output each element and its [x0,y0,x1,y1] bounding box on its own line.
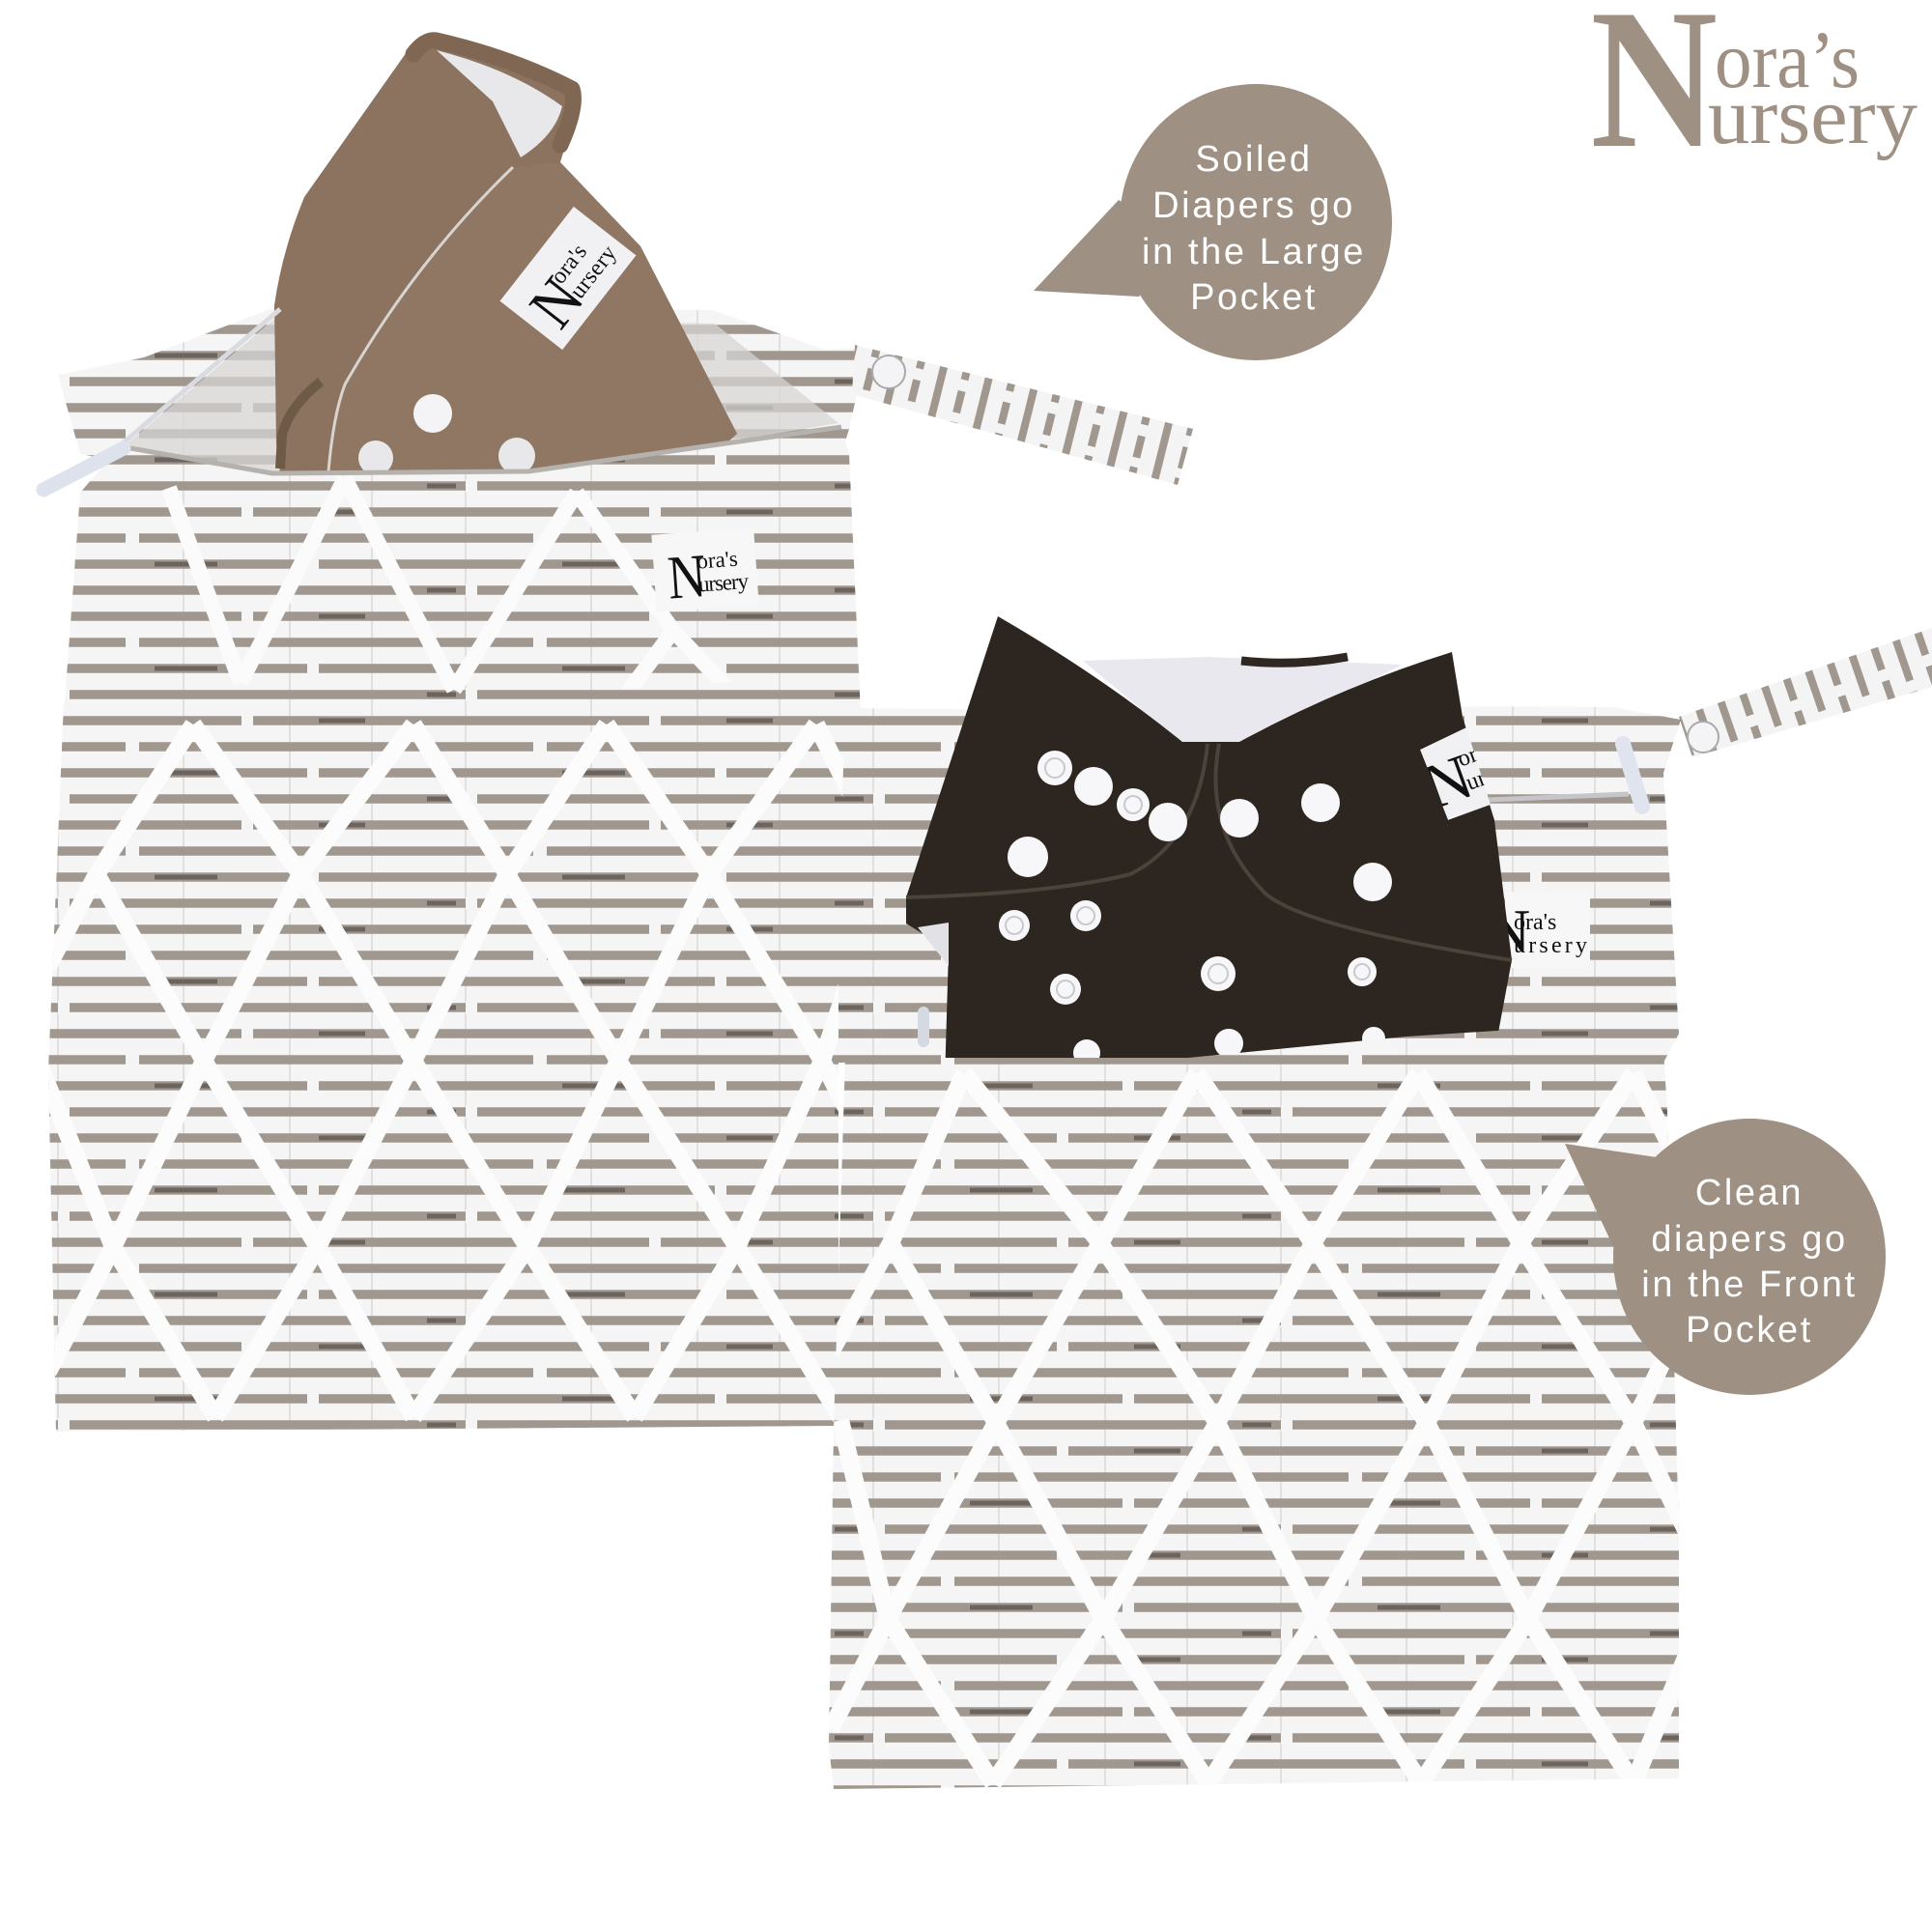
label text: N [516,265,597,341]
zipper pull [1623,744,1642,807]
dark brown diaper [906,616,1512,1082]
strap snap [1688,722,1719,753]
flap edge stitching [906,744,1512,960]
woven label: N [666,541,708,612]
white lining [437,50,562,157]
callout: soiled diapers: Pocket [1190,277,1318,318]
snap socket rings [1006,758,1370,998]
large bag snap strap [852,345,1193,485]
panel: small wet bag [829,616,1932,1789]
small bag front pocket [829,1020,1729,1789]
zipper pull [43,448,124,490]
inside label: N [1486,896,1530,965]
pocket diamond lattice [39,724,918,1417]
diaper snaps [999,751,1392,1066]
small bag back panel [837,705,1681,1063]
elastic edge [413,41,574,145]
diaper woven label: ur [1463,766,1490,796]
upper panel lattice [169,478,734,705]
callout: clean diapers [1565,1119,1886,1395]
brown diaper woven label [500,207,638,351]
large bag grey lining [124,314,838,475]
inside label [1486,892,1590,968]
woven label [651,527,759,613]
callout: clean diapers: in the Front [1641,1264,1858,1305]
callout: clean diapers: Clean [1695,1173,1804,1213]
white lining edge under flap [918,923,949,966]
large bag front pocket [48,690,843,1432]
brown diaper woven label: ursery [565,241,622,303]
snaps [413,394,452,433]
brown diaper [274,35,737,475]
pocket diamond lattice [831,1073,1729,1783]
front flap [328,162,737,473]
woven label: ursery [697,569,750,596]
callout: soiled diapers [1034,84,1392,360]
large bag upper front panel [43,309,861,715]
diaper woven label: or [1454,742,1481,772]
logo: Nora's Nursery: ursery [1708,71,1918,161]
callout: soiled diapers: Soiled [1195,139,1313,180]
logo: Nora's Nursery [1590,0,1918,190]
small bag strap [1679,628,1932,757]
callout: soiled diapers: in the Large [1142,232,1366,272]
large bag back flap [58,305,861,462]
diaper woven label: N [1414,741,1482,823]
diaper body [906,616,1512,1082]
brown diaper woven label: ora's [546,240,592,289]
white lining [1083,657,1403,744]
inside label: ursery [1514,933,1587,958]
woven label: ora's [696,547,739,574]
callout: soiled diapers: Diapers go [1152,185,1355,226]
inside label: ora's [1514,910,1556,935]
diaper woven label [1420,727,1490,820]
leg elastic [280,382,321,469]
logo: Nora's Nursery: ora’s [1715,15,1860,105]
strap snap [872,355,905,388]
callout: clean diapers: diapers go [1651,1219,1848,1260]
callout: clean diapers: Pocket [1686,1310,1813,1350]
zipper line [120,427,841,473]
hidden pocket zipper pull [918,1012,929,1041]
zipper line [1488,794,1629,800]
